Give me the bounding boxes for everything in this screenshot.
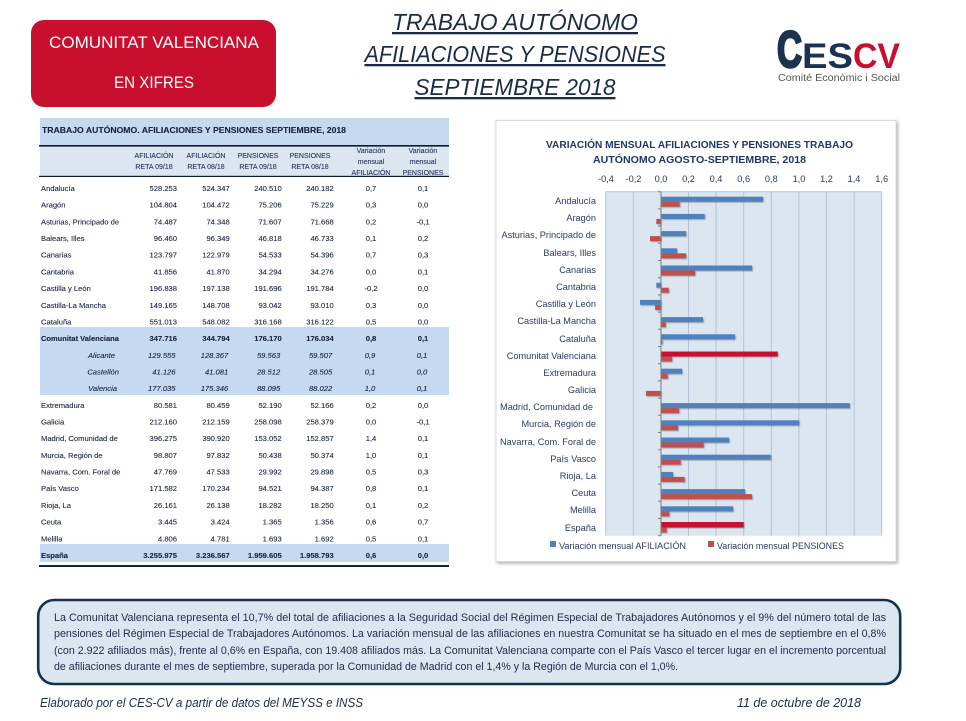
row: Ceuta: 0,6: [366, 518, 376, 527]
table header row: PENSIONES: [403, 170, 444, 177]
row: Madrid: 0,1: [418, 434, 428, 443]
row: Canarias: 122.979: [202, 251, 230, 260]
row: Valencia: 175.346: [201, 384, 229, 393]
row: Ceuta: Ceuta: [41, 518, 62, 527]
row: Murcia: 50.438: [258, 451, 282, 460]
table header row: PENSIONES: [290, 153, 331, 160]
row: España: 1.959.605: [248, 551, 282, 560]
x axis labels: 0,8: [765, 174, 778, 184]
table header row: AFILIACIÓN: [135, 151, 173, 160]
row: España: 3.255.975: [143, 551, 178, 560]
chart title: AUTÓNOMO AGOSTO-SEPTIEMBRE, 2018: [593, 153, 806, 166]
row: País Vasco: [41, 484, 428, 493]
row: Aragón: 104.472: [202, 201, 230, 210]
highlight band: España: [40, 544, 449, 562]
row: España: 1.958.793: [300, 551, 334, 560]
logo: CES CV: [777, 21, 901, 84]
row: País Vasco: 0,1: [418, 484, 428, 493]
title: [363, 9, 666, 100]
row: Canarias: [41, 251, 428, 260]
row: País Vasco: 94.521: [258, 484, 282, 493]
category labels: Murcia, Región de: [521, 419, 596, 429]
category labels: Castilla-La Mancha: [517, 316, 597, 326]
row: Castellón: 28.512: [256, 368, 281, 376]
row: Castellón: [87, 368, 428, 376]
badge: Comunitat Valenciana en xifres: [31, 20, 276, 107]
row: Cataluña: Cataluña: [41, 317, 72, 326]
row: Ceuta: 1.356: [315, 518, 334, 527]
row: Aragón: [41, 201, 428, 210]
row: Murcia: 1,0: [366, 451, 376, 460]
table header row: RETA 09/18: [135, 164, 173, 171]
row: Galicia: 0,0: [366, 418, 376, 426]
row: Asturias: Asturias, Principado de: [41, 217, 119, 226]
category labels: Melilla: [570, 505, 597, 515]
highlight band: Comunitat Valenciana: [40, 327, 449, 395]
row: Alicante: 128.367: [201, 351, 229, 360]
row: Castilla y León: 0,0: [418, 284, 428, 293]
chart legend: Variación mensual PENSIONES: [717, 541, 844, 551]
row: Castilla y León: [41, 284, 428, 293]
row: Extremadura: 52.166: [310, 401, 334, 410]
row: Cataluña: 0,0: [418, 317, 428, 326]
chart legend: [550, 541, 844, 551]
row: Castellón: 41.081: [205, 368, 228, 376]
chart legend: Variación mensual AFILIACIÓN: [559, 541, 686, 551]
row: Murcia: 50.374: [310, 451, 334, 460]
table header row: Variación: [357, 148, 385, 155]
row: Madrid: 1,4: [366, 434, 376, 443]
row: Andalucía: 0,7: [366, 184, 376, 193]
row: Castilla y León: -0,2: [364, 284, 378, 293]
row: Extremadura: 80.459: [206, 401, 230, 410]
row: Castilla y León: 197.138: [202, 284, 230, 293]
row: Castellón: 41.126: [152, 368, 176, 376]
row: Castilla-La Mancha: 0,0: [418, 301, 428, 310]
row: Melilla: 1.692: [315, 534, 334, 543]
row: Comunitat Valenciana: 176.034: [306, 334, 334, 343]
row: Madrid: 390.920: [202, 434, 230, 443]
row: Murcia: Murcia, Región de: [41, 451, 103, 460]
row: Castilla y León: 191.696: [254, 284, 282, 293]
row: Ceuta: 1.365: [263, 518, 282, 527]
row: Canarias: 54.396: [310, 251, 334, 260]
row: Cataluña: 316.168: [254, 317, 282, 326]
category labels: España: [565, 523, 597, 533]
row: Murcia: 97.832: [206, 451, 230, 460]
category labels: Cantabria: [556, 282, 597, 292]
row: Rioja: [41, 501, 428, 510]
x axis labels: 0,0: [655, 174, 667, 184]
callout: summary text: (con 2.922 afiliados más), frente al 0,6% en España, con 19.408 afiliados más. La Comunitat Valenciana comparte con el País Vasco el tercer lugar en el incremento porcentual: [54, 645, 886, 657]
row: Alicante: 0,9: [365, 351, 376, 360]
category labels: Ceuta: [571, 488, 597, 498]
panel: bar chart: [496, 120, 896, 562]
row: Castellón: 0,1: [365, 368, 375, 376]
row: Melilla: 1.693: [263, 534, 282, 543]
category labels: Aragón: [566, 213, 596, 223]
row: Valencia: 88.022: [309, 384, 333, 393]
row: Alicante: 59.563: [257, 351, 281, 360]
x axis labels: 1,0: [793, 174, 805, 184]
row: Navarra: 29.898: [310, 468, 334, 477]
row: Rioja: Rioja, La: [41, 501, 72, 510]
row: Comunitat Valenciana: 0,1: [418, 334, 429, 343]
callout: summary text: pensiones del Régimen Especial de Trabajadores Autónomos. La variación mensual de las afiliaciones en nuestra Comunitat se ha situado en el mes de septiembre en el 0,8%: [54, 628, 886, 640]
row: Asturias: -0,1: [416, 217, 430, 226]
row: Ceuta: [41, 518, 428, 527]
row: País Vasco: 0,8: [366, 484, 376, 493]
category labels: Madrid, Comunidad de: [500, 402, 593, 412]
category labels: Navarra, Com. Foral de: [500, 437, 596, 447]
row: Aragón: 104.804: [150, 201, 177, 210]
row: Melilla: 4.781: [211, 534, 230, 543]
row: País Vasco: 94.387: [310, 484, 334, 493]
row: Canarias: Canarias: [41, 251, 72, 260]
logo: CES CV: ES: [802, 37, 853, 76]
table title band: TRABAJO AUTÓNOMO. AFILIACIONES Y PENSIONES SEPTIEMBRE, 2018: [42, 124, 346, 135]
category labels: Cataluña: [559, 334, 597, 344]
title: TRABAJO AUTÓNOMO: [392, 9, 638, 35]
row: Asturias: [41, 217, 430, 226]
row: Navarra: 29.992: [258, 468, 282, 477]
row: España: [41, 551, 428, 560]
row: Cataluña: 316.122: [306, 317, 334, 326]
chart title: [546, 138, 853, 166]
row: Canarias: 54.533: [258, 251, 282, 260]
badge: Comunitat Valenciana en xifres: COMUNITAT VALENCIANA: [49, 33, 260, 52]
callout: summary text: [38, 600, 900, 684]
row: País Vasco: País Vasco: [41, 484, 79, 493]
row: Valencia: 0,1: [417, 384, 427, 393]
row: Cataluña: 551.013: [150, 317, 177, 326]
row: Extremadura: 52.190: [258, 401, 282, 410]
table header row: PENSIONES: [238, 153, 279, 160]
row: Andalucía: 240.510: [254, 184, 282, 193]
x axis labels: 1,4: [848, 174, 860, 184]
logo: CES CV: Comité Econòmic i Social: [778, 73, 900, 84]
row: Valencia: 177.035: [148, 384, 176, 393]
row: Murcia: 98.807: [154, 451, 177, 460]
row: Murcia: [41, 451, 428, 460]
row: Melilla: 0,1: [418, 534, 428, 543]
row: Alicante: 129.555: [148, 351, 176, 360]
row: España: 0,6: [366, 551, 376, 560]
row: Andalucía: 0,1: [418, 184, 428, 193]
row: Madrid: Madrid, Comunidad de: [41, 434, 118, 443]
row: Madrid: 152.857: [306, 434, 334, 443]
chart card: [496, 120, 896, 562]
row: Castellón: Castellón: [87, 368, 119, 376]
row: Valencia: [88, 384, 427, 393]
row: Ceuta: 3.445: [158, 518, 177, 527]
row: Aragón: 0,3: [366, 201, 376, 210]
row: Balears: Balears, Illes: [41, 234, 85, 243]
category labels: Balears, Illes: [543, 248, 596, 258]
row: Aragón: 0,0: [418, 201, 428, 210]
row: Navarra: Navarra, Com. Foral de: [41, 468, 120, 477]
row: Alicante: Alicante: [87, 351, 115, 360]
row: Castilla-La Mancha: 149.165: [150, 301, 177, 310]
row: Cantabria: 0,1: [418, 267, 428, 276]
row: Asturias: 71.668: [310, 217, 334, 226]
table header row: RETA 08/18: [187, 164, 225, 171]
x axis labels: 0,6: [737, 174, 750, 184]
row: Canarias: 0,3: [418, 251, 428, 260]
row: Comunitat Valenciana: 176.170: [254, 334, 282, 343]
table title band: [40, 118, 449, 145]
row: Castilla-La Mancha: 148.708: [202, 301, 230, 310]
category labels: Andalucía: [555, 196, 597, 206]
logo: CES CV: C: [777, 21, 802, 78]
row: Cantabria: 0,0: [366, 267, 376, 276]
row: Madrid: [41, 434, 428, 443]
category labels: Canarias: [559, 265, 596, 275]
row: Rioja: 0,2: [418, 501, 428, 510]
row: Valencia: Valencia: [88, 384, 117, 393]
row: Rioja: 18.282: [258, 501, 282, 510]
row: Galicia: [41, 418, 430, 426]
table header row: RETA 09/18: [239, 164, 277, 171]
zero axis with tick marks: [658, 192, 661, 536]
row: Cantabria: Cantabria: [41, 267, 75, 276]
row: Castilla y León: 196.838: [150, 284, 177, 293]
category labels: País Vasco: [550, 454, 596, 464]
row: Alicante: 59.507: [309, 351, 333, 360]
row: Aragón: Aragón: [41, 201, 66, 210]
row: Galicia: -0,1: [416, 418, 430, 426]
row: Rioja: 0,1: [366, 501, 376, 510]
row: Valencia: 1,0: [365, 384, 376, 393]
row: Cantabria: [41, 267, 428, 276]
row: Valencia: 88.095: [257, 384, 281, 393]
row: Madrid: 396.275: [150, 434, 177, 443]
row: Comunitat Valenciana: 0,8: [366, 334, 376, 343]
table header row: AFILIACIÓN: [187, 151, 225, 160]
row: Castellón: 28.505: [308, 368, 333, 376]
row: Andalucía: Andalucía: [41, 184, 76, 193]
row: Castilla-La Mancha: 93.010: [310, 301, 334, 310]
title: AFILIACIONES Y PENSIONES: [363, 41, 666, 67]
row: Extremadura: Extremadura: [41, 401, 85, 410]
row: Asturias: 74.348: [206, 217, 230, 226]
row: Melilla: [41, 534, 428, 543]
row: Balears: 96.349: [206, 234, 230, 243]
table header row: AFILIACIÓN: [352, 168, 390, 177]
row: Melilla: Melilla: [41, 534, 63, 543]
row: Rioja: 26.138: [206, 501, 230, 510]
row: Aragón: 75.206: [258, 201, 282, 210]
row: Balears: 0,1: [366, 234, 376, 243]
x axis labels: 0,4: [710, 174, 722, 184]
row: Balears: 46.818: [258, 234, 282, 243]
row: País Vasco: 171.582: [150, 484, 177, 493]
x axis labels: -0,4: [598, 174, 614, 184]
row: Castilla-La Mancha: 93.042: [258, 301, 282, 310]
row: Galicia: Galicia: [41, 418, 65, 426]
row: Navarra: 0,3: [418, 468, 428, 477]
category labels: [500, 196, 597, 533]
row: Castilla y León: Castilla y León: [41, 284, 91, 293]
callout: summary text: de afiliaciones durante el mes de septiembre, superada por la Comunidad de Madrid con el 1,4% y la Región de Murcia con el 1,0%.: [54, 661, 678, 673]
table header row: [39, 145, 449, 177]
x axis labels: -0,2: [626, 174, 641, 184]
row: España: 0,0: [418, 551, 428, 560]
row: Ceuta: 0,7: [418, 518, 428, 527]
category labels: Galicia: [568, 385, 597, 395]
category labels: Castilla y León: [536, 299, 596, 309]
row: Navarra: 47.533: [206, 468, 230, 477]
row: Andalucía: 524.347: [202, 184, 230, 193]
row: Asturias: 74.487: [154, 217, 177, 226]
x axis labels: 1,2: [820, 174, 833, 184]
row: Cantabria: 34.276: [310, 267, 334, 276]
row: España: 3.236.567: [196, 551, 230, 560]
row: País Vasco: 170.234: [202, 484, 230, 493]
row: Cantabria: 34.294: [258, 267, 282, 276]
row: Navarra: 0,5: [366, 468, 376, 477]
row: Melilla: 4.806: [158, 534, 177, 543]
row: Andalucía: 240.182: [306, 184, 334, 193]
row: Canarias: 0,7: [366, 251, 376, 260]
row: Galicia: 212.160: [150, 418, 177, 426]
row: Comunitat Valenciana: Comunitat Valenciana: [41, 334, 120, 343]
row: Ceuta: 3.424: [211, 518, 230, 527]
data table: [39, 118, 449, 567]
logo: CES CV: CV: [853, 37, 901, 76]
row: Asturias: 71.607: [258, 217, 282, 226]
row: Aragón: 75.229: [310, 201, 334, 210]
row: Balears: 96.460: [154, 234, 177, 243]
row: Extremadura: [41, 401, 428, 410]
row: Cataluña: 548.082: [202, 317, 230, 326]
table header row: mensual: [358, 159, 385, 166]
row: Cantabria: 41.870: [206, 267, 230, 276]
row: Melilla: 0,5: [366, 534, 376, 543]
row: Rioja: 18.250: [310, 501, 334, 510]
row: Asturias: 0,2: [366, 217, 376, 226]
footer: date: 11 de octubre de 2018: [737, 696, 861, 710]
row: Alicante: [87, 351, 427, 360]
chart title: VARIACIÓN MENSUAL AFILIACIONES Y PENSIONES TRABAJO: [546, 138, 853, 151]
row: España: España: [41, 551, 69, 560]
footer: source: Elaborado por el CES-CV a partir de datos del MEYSS e INSS: [40, 696, 364, 710]
plot area: [606, 192, 882, 536]
row: Rioja: 26.161: [154, 501, 177, 510]
row: Cantabria: 41.856: [154, 267, 177, 276]
table header row: Variación: [409, 148, 437, 155]
table header row: RETA 08/18: [291, 164, 329, 171]
table bottom rule: [39, 565, 449, 567]
x axis labels: 0,2: [682, 174, 695, 184]
row: Galicia: 212.159: [202, 418, 230, 426]
row: Cataluña: [41, 317, 428, 326]
category labels: Comunitat Valenciana: [507, 351, 597, 361]
title: SEPTIEMBRE 2018: [414, 74, 616, 100]
bars: [640, 197, 850, 532]
category labels: Extremadura: [543, 368, 597, 378]
row: Balears: 0,2: [418, 234, 428, 243]
row: Comunitat Valenciana: 347.716: [150, 334, 177, 343]
category labels: Rioja, La: [560, 471, 597, 481]
row: Extremadura: 0,2: [366, 401, 376, 410]
row: Cataluña: 0,5: [366, 317, 376, 326]
row: Navarra: 47.769: [154, 468, 177, 477]
category labels: Asturias, Principado de: [502, 230, 596, 240]
row: Murcia: 0,1: [418, 451, 428, 460]
badge: Comunitat Valenciana en xifres: EN XIFRES: [114, 73, 194, 92]
row: Castilla-La Mancha: [41, 301, 428, 310]
table header row: mensual: [410, 159, 437, 166]
callout: summary text: La Comunitat Valenciana representa el 10,7% del total de afiliaciones a la Seguridad Social del Régimen Especial de Trabajadores Autónomos y el 9% del número total de las: [54, 612, 887, 624]
row: Andalucía: 528.253: [150, 184, 177, 193]
row: Castellón: 0,0: [417, 368, 428, 376]
row: Extremadura: 0,0: [418, 401, 428, 410]
row: Extremadura: 80.581: [154, 401, 177, 410]
row: Comunitat Valenciana: [41, 334, 429, 343]
row: Balears: 46.733: [310, 234, 334, 243]
row: Castilla-La Mancha: 0,3: [366, 301, 376, 310]
row: Castilla-La Mancha: Castilla-La Mancha: [41, 301, 107, 310]
row: Alicante: 0,1: [417, 351, 427, 360]
row: Castilla y León: 191.784: [306, 284, 334, 293]
row: Canarias: 123.797: [150, 251, 177, 260]
row: Galicia: 258.098: [254, 418, 282, 426]
row: Galicia: 258.379: [306, 418, 334, 426]
row: Andalucía: [41, 184, 428, 193]
row: Balears: [41, 234, 428, 243]
x axis labels: [598, 174, 888, 184]
row: Navarra: [41, 468, 428, 477]
row: Madrid: 153.052: [254, 434, 282, 443]
row: Comunitat Valenciana: 344.794: [202, 334, 230, 343]
x axis labels: 1,6: [875, 174, 888, 184]
